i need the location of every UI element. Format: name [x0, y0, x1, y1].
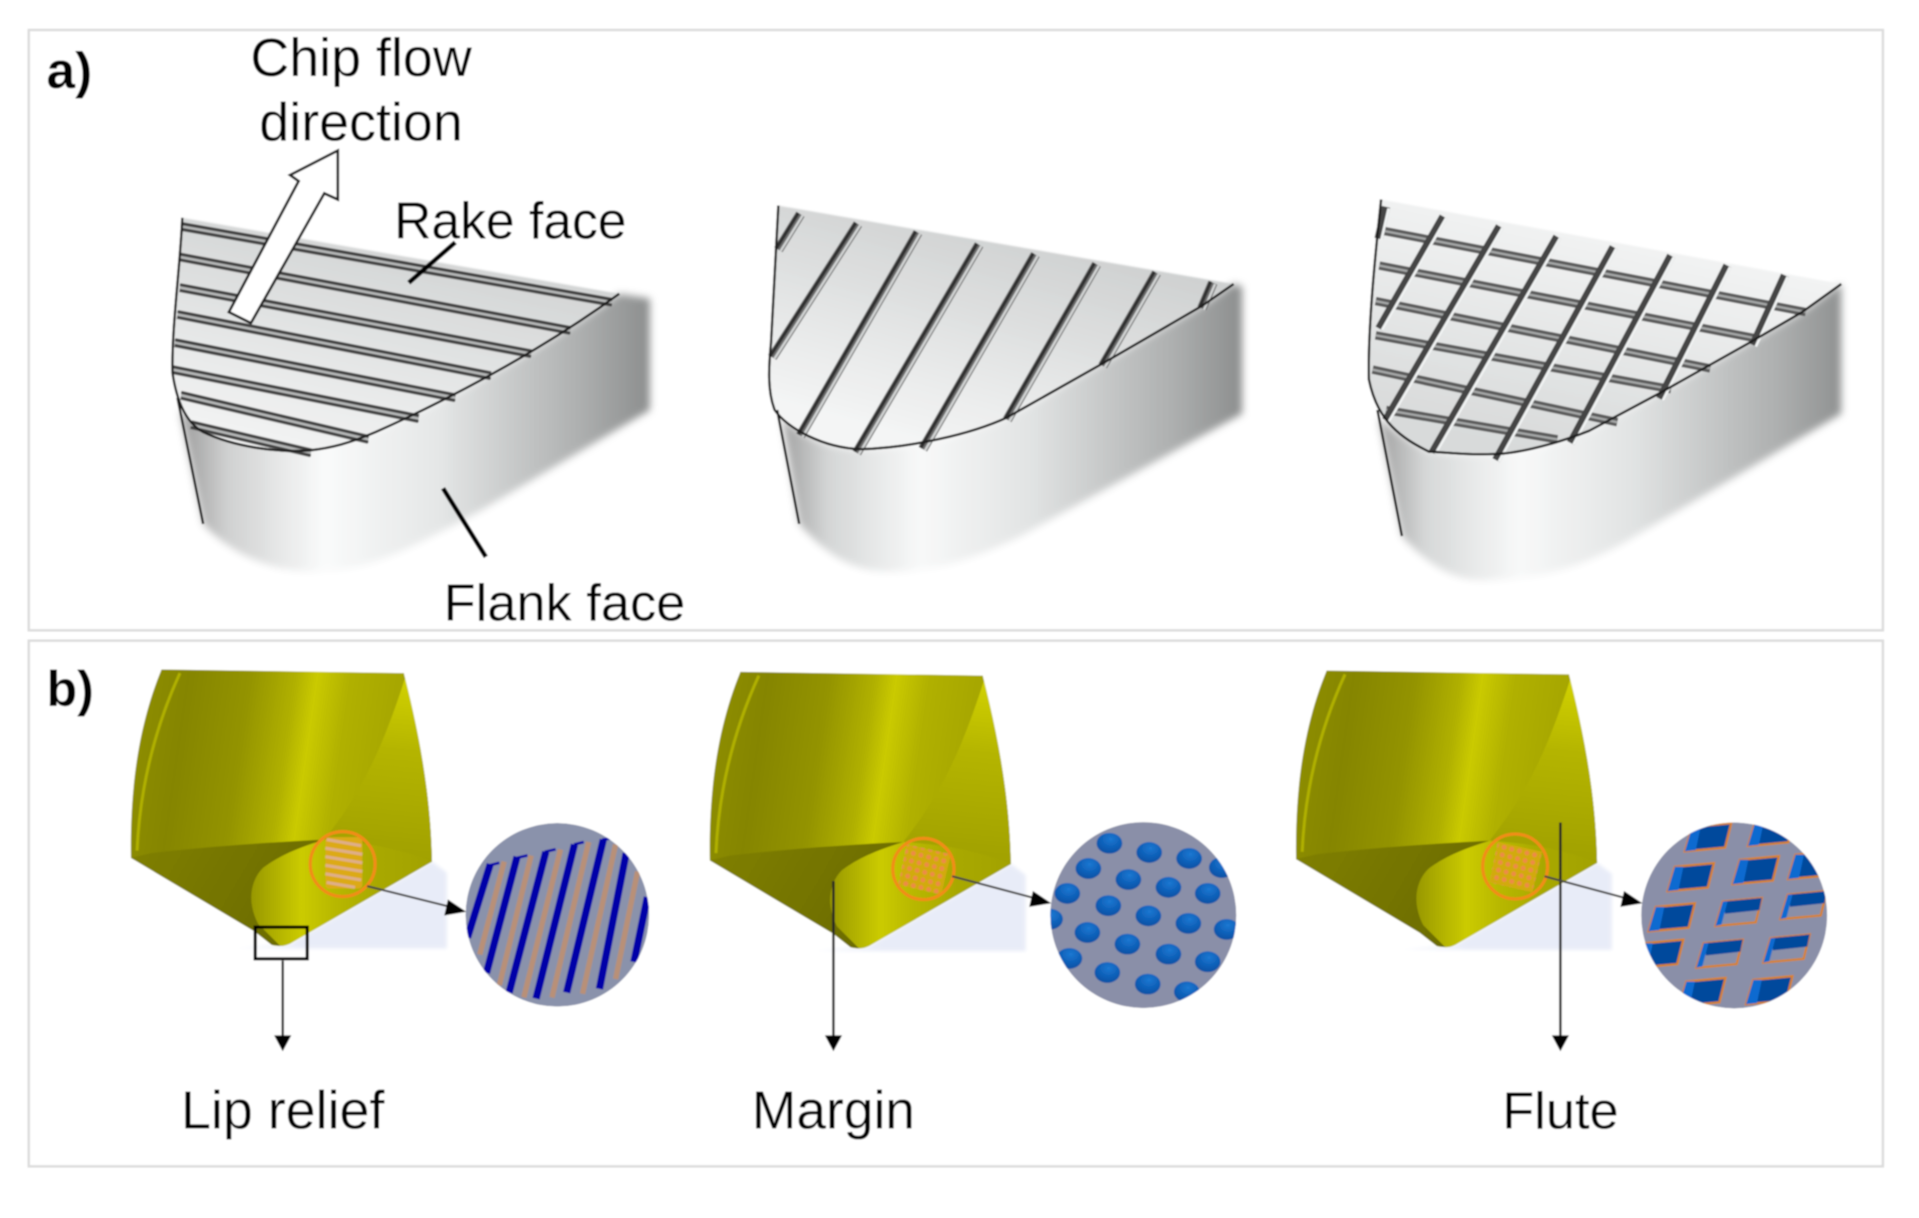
panel a label: a) [47, 41, 92, 99]
tool 3: cross-hatched grooves [1369, 199, 1841, 580]
drill 1 texture spot [310, 832, 375, 896]
chip flow direction arrow [229, 151, 338, 323]
tool 2 rake face [769, 206, 1234, 449]
drill 3 texture spot [1483, 834, 1548, 899]
panel b label: b) [47, 661, 94, 717]
drill 3: flute [1296, 671, 1612, 950]
panel b frame [29, 641, 1883, 1166]
zoom arrow to inset 2 [952, 876, 1051, 907]
label: flank face: Flank face [444, 575, 685, 633]
tool 3 flank face [1379, 284, 1841, 580]
tool 2 grooves [770, 213, 1215, 454]
tool 1 rake face [172, 218, 619, 451]
tool 3 diagonal grooves [1379, 207, 1788, 462]
tool 2 flank face [782, 284, 1242, 572]
tool 3 rake face [1369, 199, 1841, 454]
label: margin: Margin [752, 1081, 915, 1140]
tool 1 grooves [173, 223, 612, 456]
label: flute: Flute [1502, 1082, 1619, 1140]
tool 1 flank face [180, 294, 650, 572]
inset 1: parallel grooves [466, 823, 649, 1007]
panel a frame [29, 30, 1883, 630]
drill 1: lip relief [131, 669, 447, 948]
drill 2: margin [710, 672, 1026, 951]
label: direction line: direction [259, 93, 463, 153]
tool 3 horizontal grooves [1373, 230, 1806, 439]
tool 2 edges [769, 206, 1234, 524]
drill 2 texture spot [893, 838, 954, 900]
tool 3 edges [1369, 199, 1841, 536]
panel a: groove orientations on the rake face [29, 28, 1883, 633]
inset 2: dome pattern [1037, 822, 1240, 1008]
arrow to lip relief label [274, 961, 291, 1051]
panel b: texture location on the drill [29, 641, 1883, 1166]
arrow to flute label [1552, 822, 1569, 1051]
label: chip flow direction: Chip flow [250, 28, 472, 88]
flank face leader line [443, 488, 486, 557]
tool 1 edges [172, 218, 619, 524]
label: lip relief: Lip relief [181, 1080, 385, 1140]
label: rake face: Rake face [394, 192, 627, 250]
rake face leader line [409, 242, 455, 283]
tool 2: diagonal grooves [769, 206, 1242, 572]
drill 1 lip relief marker box [255, 927, 307, 959]
zoom arrow to inset 3 [1545, 876, 1642, 907]
inset 3: rectangular dimple pattern [1637, 818, 1835, 1008]
arrow to margin label [825, 881, 842, 1051]
zoom arrow to inset 1 [367, 886, 466, 915]
tool 1: grooves perpendicular to chip flow [172, 218, 650, 572]
